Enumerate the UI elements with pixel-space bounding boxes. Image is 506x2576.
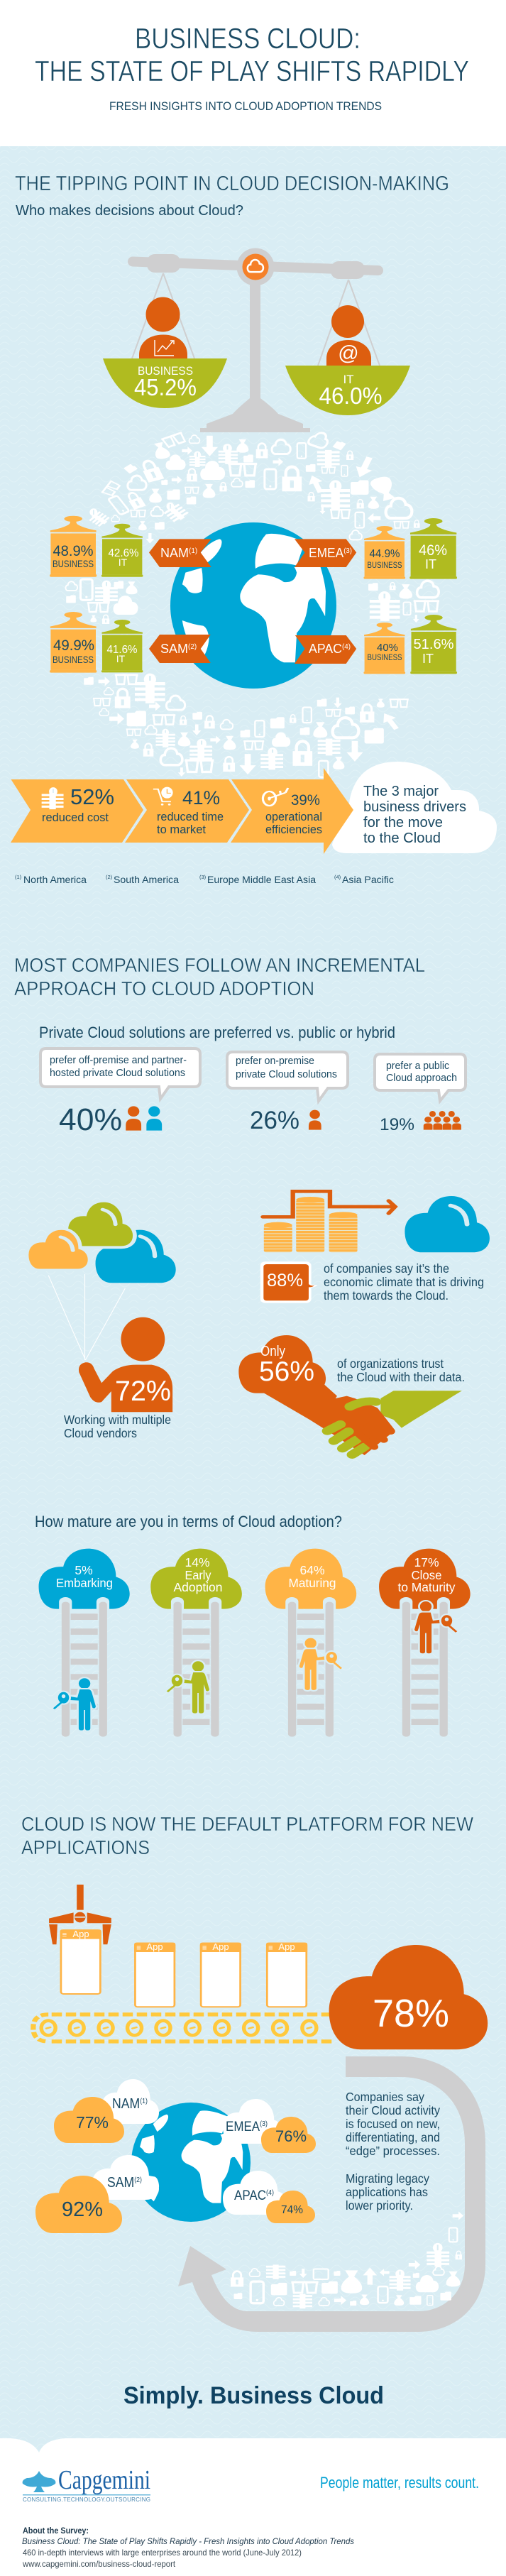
callout: 88 percent: economic climate that is driving — [324, 1275, 484, 1289]
small globe — [131, 2103, 251, 2222]
region label: SAM: (2) — [188, 643, 197, 651]
handshake with 56 percent cloud: the Cloud with their data. — [337, 1370, 465, 1384]
maturity ladder: close to maturity: 17% — [414, 1555, 439, 1569]
icon: cart and clock — [153, 787, 173, 806]
app card 3 — [200, 1943, 241, 2007]
cloud pair: EMEA 76 percent: EMEA — [226, 2120, 264, 2134]
stat: 26 percent — [250, 1107, 321, 1134]
icon: at sign: @ — [338, 342, 359, 365]
maturity ladder: close to maturity: to Maturity — [397, 1580, 456, 1594]
weight: EMEA business — [363, 526, 405, 579]
cloud: business drivers — [332, 762, 497, 853]
app cards: App — [146, 1941, 163, 1952]
region label: APAC: APAC — [309, 642, 343, 656]
about the survey: Business Cloud: The State of Play Shifts Rapidly - Fresh Insights into Cloud Adoption Trends — [22, 2536, 354, 2546]
speech bubble: public cloud: Cloud approach — [386, 1073, 457, 1084]
weight: EMEA IT: 46% — [419, 542, 447, 559]
business pan: BUSINESS — [138, 364, 193, 378]
weight: APAC IT: IT — [422, 652, 434, 666]
cloud: business drivers: for the move — [363, 815, 443, 831]
IT person — [326, 305, 371, 366]
big cloud: 78 percent — [329, 1945, 488, 2049]
chevron: operational efficiencies: efficiencies — [265, 823, 322, 836]
about the survey: 460 in-depth interviews with large enterprises around the world (June-July 2012) — [23, 2548, 302, 2558]
section heading: default platform: APPLICATIONS — [21, 1836, 150, 1858]
icon: money — [42, 787, 64, 809]
section heading: incremental approach: APPROACH TO CLOUD ADOPTION — [14, 977, 314, 999]
weight: NAM IT — [101, 524, 143, 577]
weight: APAC business: BUSINESS — [368, 652, 402, 662]
icon: chart — [155, 340, 174, 356]
coins to cloud graphic — [263, 1191, 490, 1252]
maturity ladder: maturing: 64% — [299, 1563, 325, 1577]
person with raised arm — [79, 1317, 172, 1412]
maturity ladder: close to maturity — [379, 1549, 471, 1737]
business pan: 45.2% — [134, 374, 197, 400]
text: companies say: is focused on new, — [346, 2117, 440, 2131]
app cards: App — [278, 1941, 295, 1952]
text: companies say: lower priority. — [346, 2198, 413, 2213]
orange fingers — [360, 1420, 391, 1447]
tagline: Simply. Business Cloud — [123, 2382, 384, 2409]
title — [35, 22, 469, 87]
callout: 88 percent: 88% — [267, 1271, 303, 1290]
cloud pair: SAM 92 percent: (2) — [134, 2176, 142, 2184]
footnotes: (2) — [106, 874, 113, 880]
footnotes: (1) — [15, 874, 22, 880]
weight: APAC IT — [410, 615, 457, 674]
icon cluster inside arrow — [231, 2211, 463, 2308]
subheading: private cloud: Private Cloud solutions are preferred vs. public or hybrid — [39, 1024, 395, 1041]
app cards: App — [212, 1941, 229, 1952]
IT pan — [285, 366, 410, 415]
weight: SAM IT — [101, 620, 143, 672]
weight: NAM business: BUSINESS — [53, 559, 94, 569]
chevron: reduced time — [125, 779, 249, 843]
app card 2 — [134, 1943, 175, 2007]
region label: SAM: SAM — [160, 642, 188, 656]
speech bubble: public cloud — [375, 1054, 466, 1101]
icon ring around globe — [65, 430, 439, 777]
weight: APAC IT: 51.6% — [413, 637, 454, 652]
footnotes: Asia Pacific — [342, 874, 394, 885]
rising arrow — [263, 1191, 395, 1217]
logo: Capgemini — [23, 2465, 150, 2503]
region label: NAM — [149, 539, 211, 567]
app cards: App — [72, 1929, 89, 1939]
weight: EMEA business: 44.9% — [369, 548, 400, 560]
cloud pair: APAC 74 percent: 74% — [281, 2204, 303, 2216]
coin stacks — [264, 1197, 358, 1252]
balloon clouds and person: 72 percent: 72% — [115, 1376, 171, 1407]
handshake with 56 percent cloud: of organizations trust — [337, 1356, 444, 1371]
maturity ladder: embarking — [39, 1549, 130, 1737]
maturity ladder: early adoption: Early — [185, 1568, 211, 1582]
cloud: business drivers: to the Cloud — [363, 831, 441, 846]
globe — [170, 522, 336, 689]
green sleeve — [380, 1391, 462, 1428]
about the survey: www.capgemini.com/business-cloud-report — [22, 2559, 176, 2569]
speech bubble: on-premise: prefer on-premise — [236, 1056, 314, 1067]
green thumb and fingers — [327, 1401, 375, 1454]
region label: EMEA — [295, 539, 356, 567]
scale beam — [133, 248, 378, 285]
cloud pair: NAM 77 percent — [54, 2079, 159, 2143]
text: companies say: “edge” processes. — [346, 2144, 440, 2158]
weight: SAM business: 49.9% — [53, 637, 94, 654]
cloud pair: EMEA 76 percent: 76% — [275, 2127, 307, 2145]
chevron: reduced time: reduced time — [157, 810, 224, 823]
region label: NAM: (1) — [189, 547, 197, 555]
cloud pair: EMEA 76 percent — [223, 2099, 316, 2153]
cloud pair: NAM 77 percent: NAM — [112, 2096, 143, 2112]
chevron: reduced time: 41% — [182, 787, 220, 809]
footnotes: (4) — [334, 874, 341, 880]
callout: 88 percent: of companies say it’s the — [324, 1261, 449, 1276]
cloud: business drivers: The 3 major — [363, 784, 439, 799]
chevron: reduced cost: reduced cost — [42, 811, 109, 824]
app card held by claw — [60, 1929, 101, 1994]
clouds and strings — [27, 1201, 176, 1360]
robot claw — [49, 1885, 111, 1944]
stat: 19 percent — [380, 1111, 461, 1134]
weight: SAM business: BUSINESS — [53, 654, 94, 665]
title: BUSINESS CLOUD: — [135, 22, 361, 55]
maturity ladder: maturing — [265, 1549, 356, 1737]
cloud: business drivers: business drivers — [363, 799, 466, 815]
cloud pair: NAM 77 percent: (1) — [140, 2098, 148, 2105]
orange arm and cloud — [238, 1335, 395, 1455]
right pan strings — [318, 280, 380, 366]
region label: NAM: NAM — [160, 546, 189, 560]
maturity ladder: early adoption — [150, 1549, 242, 1737]
IT pan: IT — [343, 373, 354, 386]
speech bubble: on-premise: private Cloud solutions — [236, 1069, 337, 1080]
speech bubble: partner-hosted: prefer off-premise and partner- — [50, 1055, 187, 1066]
speech bubble: on-premise — [227, 1052, 348, 1101]
maturity ladder: close to maturity: Close — [412, 1568, 441, 1582]
stat: 19 percent: 19% — [380, 1115, 414, 1134]
balloon clouds and person: 72 percent: Working with multiple — [64, 1413, 171, 1427]
footnotes: North America — [23, 874, 87, 885]
footnotes — [15, 874, 394, 885]
cloud pair: SAM 92 percent: 92% — [62, 2198, 103, 2221]
stat: 26 percent: 26% — [250, 1107, 299, 1134]
cloud pair: EMEA 76 percent: (3) — [260, 2120, 268, 2128]
left pan strings — [132, 273, 194, 358]
icon: target and key — [263, 788, 288, 806]
IT pan: 46.0% — [319, 383, 382, 409]
question: maturity: How mature are you in terms of Cloud adoption? — [35, 1513, 342, 1530]
region label: APAC: (4) — [342, 643, 351, 651]
section heading: tipping point: THE TIPPING POINT IN CLOUD DECISION-MAKING — [15, 172, 449, 195]
text: companies say: Companies say — [346, 2090, 424, 2104]
speech bubble: public cloud: prefer a public — [386, 1060, 449, 1072]
cloud pair: APAC 74 percent — [223, 2171, 315, 2223]
cloud pair: APAC 74 percent: (4) — [266, 2189, 274, 2197]
app card 4 — [266, 1943, 307, 2007]
chevron: operational efficiencies: operational — [265, 810, 322, 823]
logo: Capgemini: CONSULTING.TECHNOLOGY.OUTSOURCING — [23, 2496, 150, 2503]
stat: 40 percent — [59, 1102, 162, 1137]
cloud pair: NAM 77 percent: 77% — [76, 2113, 109, 2132]
maturity ladder: embarking: Embarking — [56, 1576, 113, 1590]
footnotes: (3) — [199, 874, 207, 880]
section heading: default platform: CLOUD IS NOW THE DEFAULT PLATFORM FOR NEW — [21, 1813, 474, 1835]
footnotes: Europe Middle East Asia — [207, 874, 316, 885]
handshake with 56 percent cloud: Only — [260, 1344, 285, 1359]
about the survey: About the Survey: — [23, 2526, 89, 2536]
callout: 88 percent: them towards the Cloud. — [324, 1288, 449, 1303]
chevron: reduced time: to market — [157, 823, 206, 836]
region label: EMEA: EMEA — [309, 546, 345, 560]
speech bubble: partner-hosted — [40, 1048, 200, 1099]
chevron: operational efficiencies: 39% — [291, 792, 320, 809]
weight: APAC business: 40% — [377, 642, 398, 654]
section heading: incremental approach: MOST COMPANIES FOLLOW AN INCREMENTAL — [14, 954, 425, 976]
weight: SAM IT: IT — [116, 653, 126, 664]
weight: EMEA IT — [409, 518, 457, 579]
text: companies say: differentiating, and — [346, 2130, 440, 2144]
logo: Capgemini: Capgemini — [58, 2465, 150, 2495]
text: companies say — [346, 2090, 440, 2213]
section heading: default platform — [21, 1813, 474, 1858]
balance scale — [103, 248, 410, 432]
maturity ladder: embarking: 5% — [75, 1563, 93, 1577]
text: companies say: their Cloud activity — [346, 2103, 440, 2117]
blue cloud — [405, 1196, 490, 1252]
chevron: operational efficiencies — [231, 768, 353, 854]
business pan — [103, 358, 227, 408]
balloon clouds and person: 72 percent — [27, 1201, 176, 1440]
weight: SAM business — [50, 612, 97, 673]
app cards — [60, 1929, 307, 2007]
circular gray arrow — [178, 2056, 485, 2332]
subtitle: FRESH INSIGHTS INTO CLOUD ADOPTION TRENDS — [109, 100, 382, 113]
weight: NAM business — [50, 516, 97, 577]
icon: spade — [23, 2471, 55, 2492]
maturity ladder: maturing: Maturing — [288, 1576, 336, 1590]
weight: EMEA IT: IT — [425, 557, 436, 571]
handshake with 56 percent cloud: 56% — [259, 1356, 314, 1387]
cloud pair: SAM 92 percent: SAM — [107, 2175, 138, 2191]
handshake with 56 percent cloud — [238, 1335, 465, 1455]
cloud pair: APAC 74 percent: APAC — [234, 2188, 270, 2203]
callout: 88 percent — [260, 1261, 484, 1303]
section heading: incremental approach — [14, 954, 425, 999]
big cloud: 78 percent: 78% — [373, 1991, 449, 2035]
weight: EMEA business: BUSINESS — [368, 560, 402, 570]
region label: APAC — [295, 635, 356, 664]
region label: SAM — [149, 635, 211, 663]
footnotes: South America — [114, 874, 179, 885]
icon: cloud hub — [243, 254, 268, 280]
weight: NAM IT: 42.6% — [108, 547, 139, 559]
chevron: reduced cost — [11, 779, 143, 843]
text: companies say: Migrating legacy — [346, 2171, 429, 2186]
business person — [139, 297, 187, 358]
about the survey — [22, 2526, 354, 2569]
text: companies say: applications has — [346, 2185, 428, 2199]
conveyor belt — [33, 2015, 336, 2041]
speech bubble: partner-hosted: hosted private Cloud solutions — [50, 1068, 185, 1079]
cloud pair: SAM 92 percent — [35, 2155, 159, 2233]
maturity ladder: early adoption: 14% — [185, 1555, 210, 1569]
region label: EMEA: (3) — [343, 547, 352, 555]
maturity ladder: early adoption: Adoption — [173, 1580, 223, 1594]
weight: NAM business: 48.9% — [53, 543, 94, 559]
question: who makes decisions: Who makes decisions about Cloud? — [16, 202, 243, 219]
weight: NAM IT: IT — [119, 557, 128, 568]
weight: APAC business — [363, 623, 405, 674]
stat: 40 percent: 40% — [59, 1102, 122, 1137]
weight: SAM IT: 41.6% — [106, 644, 138, 656]
balloon clouds and person: 72 percent: Cloud vendors — [64, 1426, 137, 1440]
scale post and base — [200, 267, 310, 432]
chevron: reduced cost: 52% — [70, 784, 114, 809]
